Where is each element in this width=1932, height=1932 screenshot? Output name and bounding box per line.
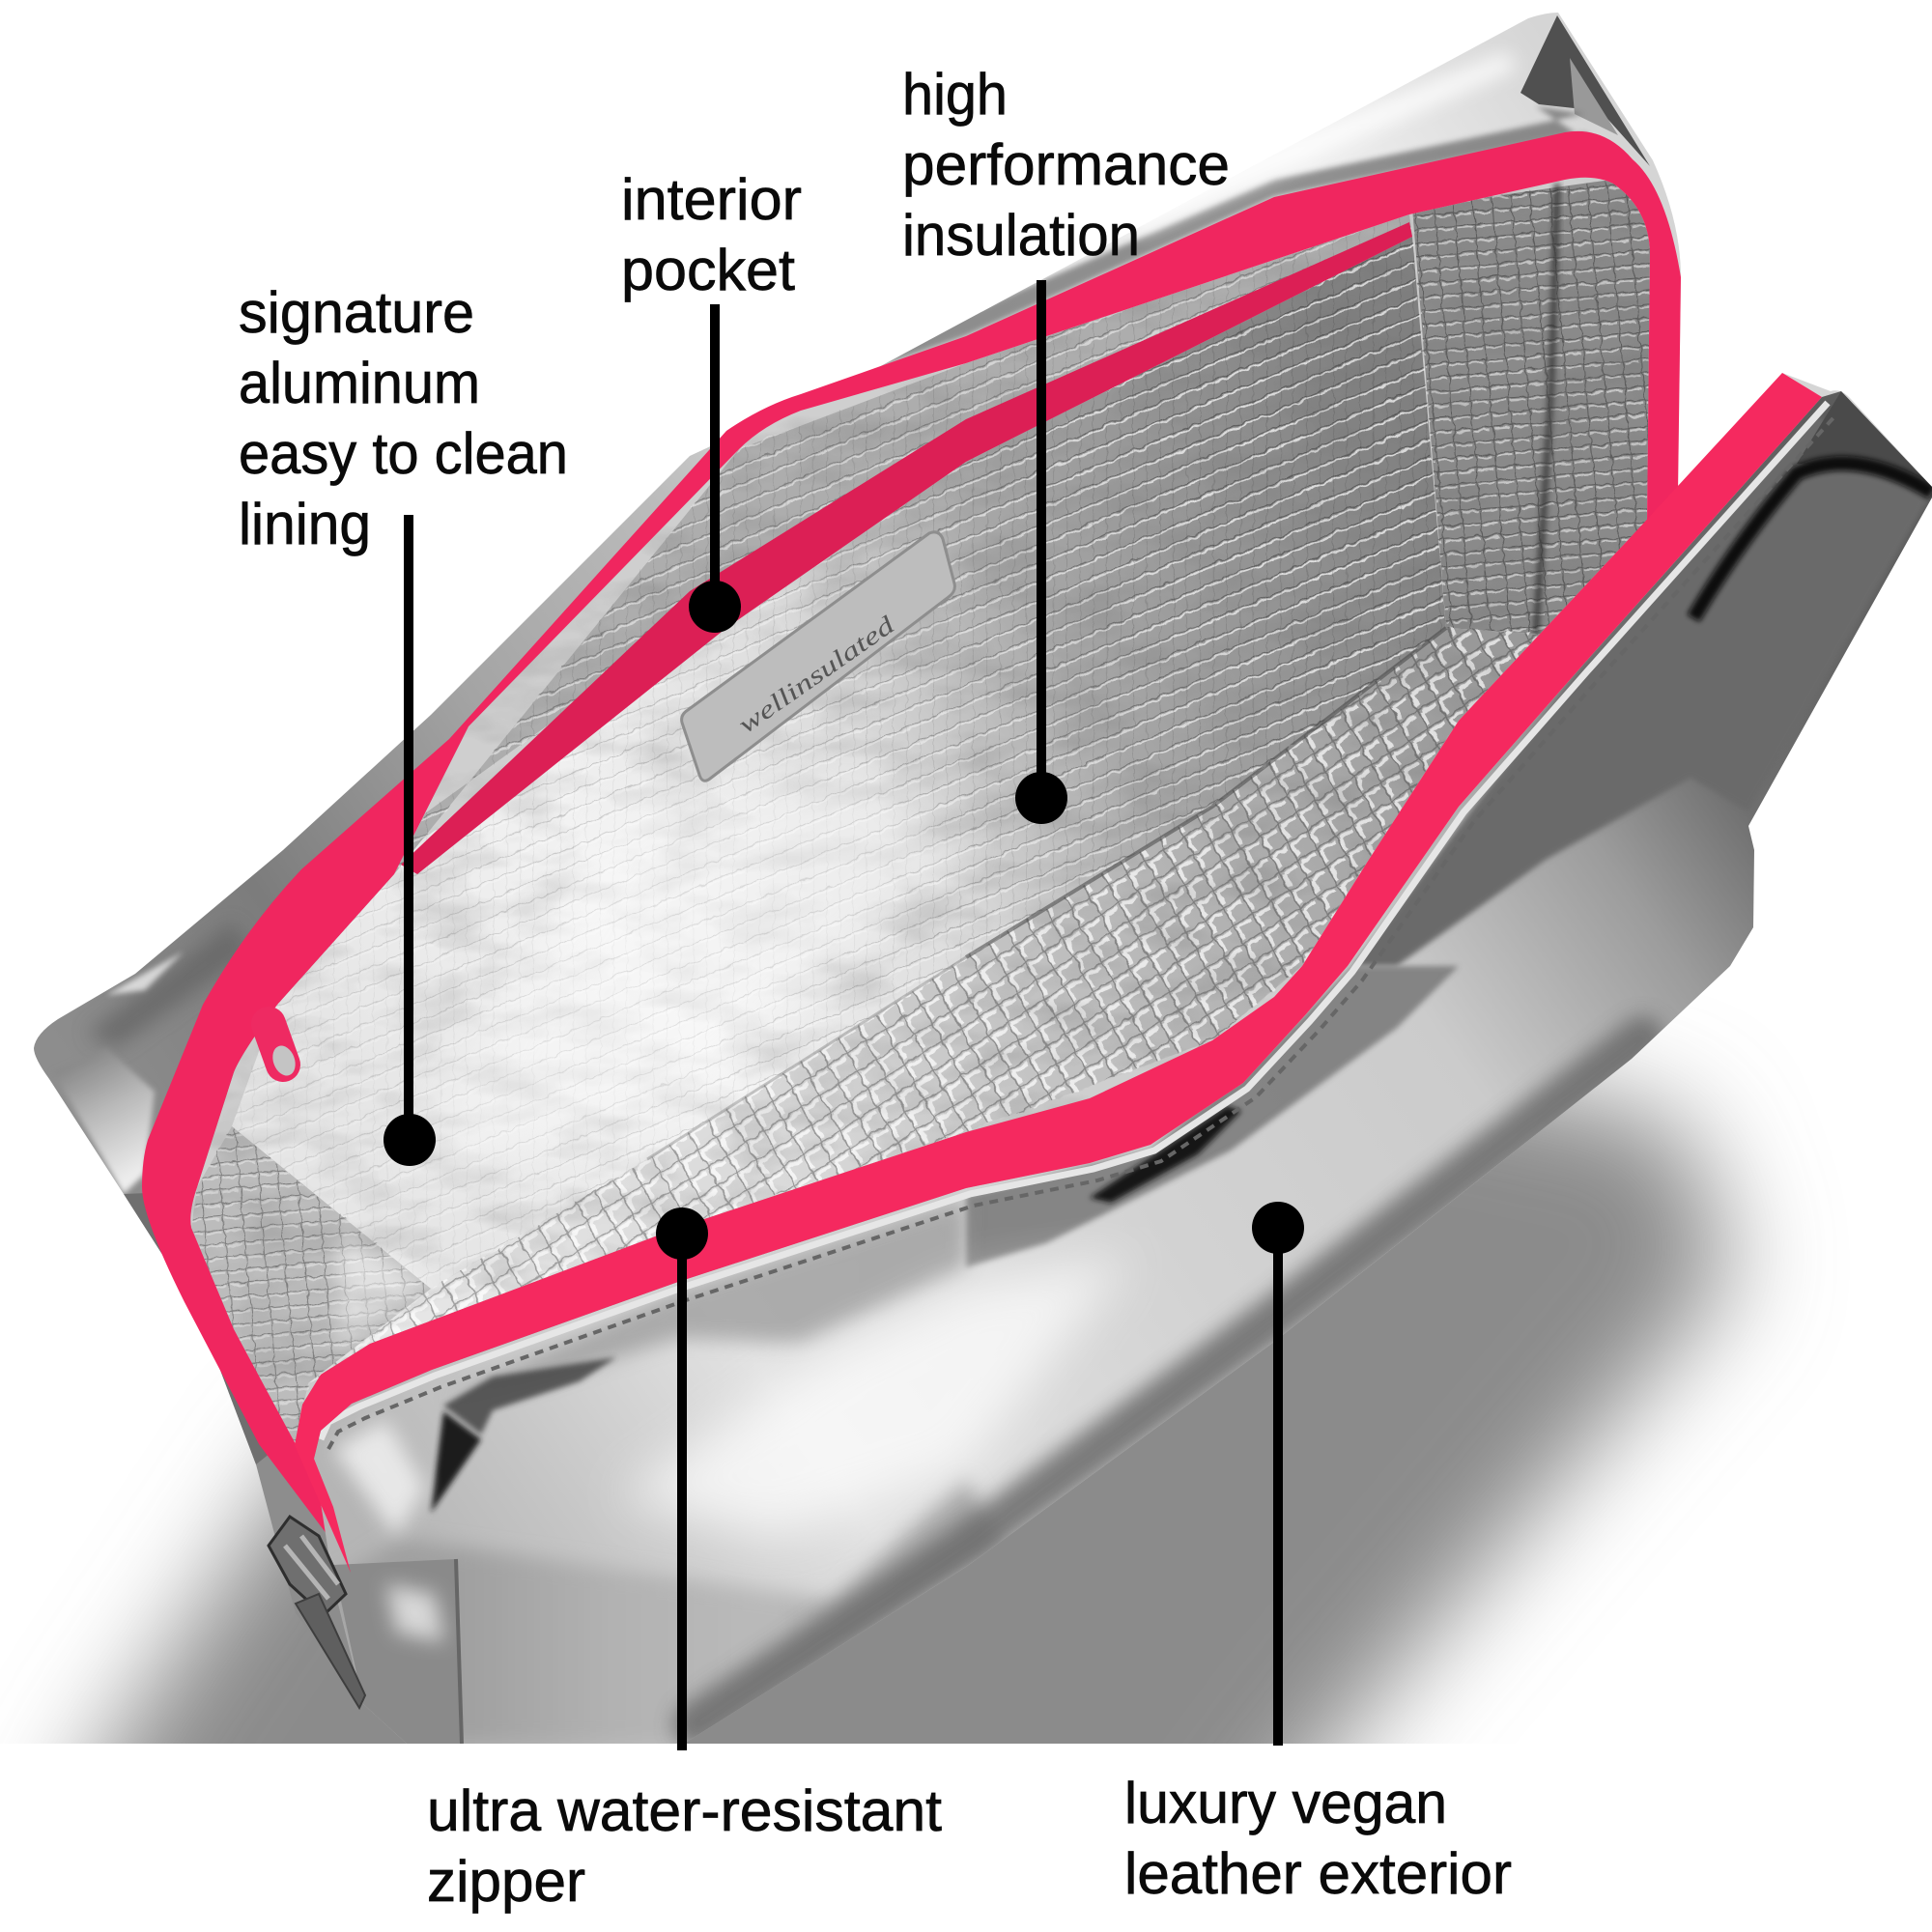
label text: easy to clean — [239, 421, 568, 486]
label text: performance — [902, 132, 1230, 197]
callout: ultra water-resistant zipper — [427, 1208, 942, 1914]
bright reflection on back wall — [406, 763, 966, 1179]
left wall — [191, 1126, 431, 1458]
marker dot — [384, 1114, 436, 1166]
label text: high — [902, 62, 1008, 127]
label text — [427, 1778, 942, 1914]
zipper pull tab — [269, 1024, 299, 1079]
callout: signature aluminum lining — [239, 280, 568, 1166]
label text: interior — [621, 167, 802, 232]
stitching along zipper — [321, 403, 1828, 1439]
label text: aluminum — [239, 351, 480, 415]
pocket label: wellinsulated — [682, 532, 954, 781]
white highlights — [618, 1256, 1130, 1536]
white lower band — [0, 1744, 1932, 1932]
right wall — [1412, 174, 1652, 635]
marker dot — [689, 581, 741, 633]
floor shadow — [31, 1041, 1792, 1744]
crinkle mottling — [174, 174, 1662, 1468]
label text — [1124, 1771, 1512, 1906]
floor — [308, 531, 1662, 1383]
label text: luxury vegan — [1124, 1771, 1447, 1835]
label text — [239, 280, 568, 556]
leader line — [677, 1234, 687, 1750]
label text: signature — [239, 280, 474, 345]
main zipper: front section — [295, 373, 1822, 1573]
label text: ultra water-resistant — [427, 1778, 942, 1843]
dark upper reflection — [1352, 415, 1932, 966]
leader line — [1273, 1228, 1283, 1746]
soft grey band beneath left stitching — [444, 1198, 966, 1401]
callout: interior pocket — [621, 167, 802, 633]
leader line — [710, 304, 720, 607]
back wall — [232, 237, 1446, 1289]
upper lining strip — [394, 214, 1412, 874]
pocket zipper tape — [401, 222, 1412, 874]
callout: high performance insulation — [902, 62, 1230, 824]
bottom corner panel — [333, 1559, 462, 1744]
marker dot — [656, 1208, 708, 1260]
label text: leather exterior — [1124, 1841, 1512, 1906]
dark edge band — [696, 1038, 1642, 1724]
marker dot — [1252, 1202, 1304, 1254]
callout: luxury vegan leather exterior — [1124, 1202, 1512, 1906]
leader line — [1037, 280, 1046, 798]
label text: zipper — [427, 1849, 585, 1914]
marker dot — [1015, 772, 1067, 824]
label text: lining — [239, 492, 371, 556]
lower body panel — [328, 1478, 1005, 1744]
leader line — [404, 515, 413, 1140]
black streaks — [1090, 1106, 1241, 1203]
label text — [621, 167, 802, 302]
main zipper: back section — [142, 131, 1681, 1566]
label text — [902, 62, 1230, 268]
label text: pocket — [621, 238, 795, 302]
pocket label: wellinsulated: wellinsulated — [733, 610, 900, 739]
label text: insulation — [902, 203, 1140, 268]
dark band beneath zipper stitching — [966, 966, 1459, 1267]
zipper slider — [269, 1517, 365, 1708]
